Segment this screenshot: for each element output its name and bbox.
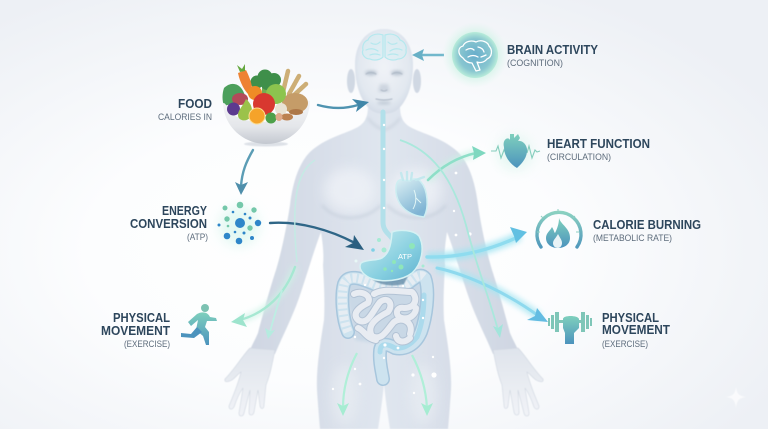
label: heart function — [547, 136, 650, 163]
esophagus — [383, 112, 393, 240]
bread roll — [282, 93, 308, 113]
icon: corner sparkle — [726, 387, 746, 408]
label: energy conversion: ENERGY — [162, 203, 207, 218]
heart organ — [396, 172, 427, 217]
arrow: food to mouth — [318, 99, 369, 112]
gauge arc — [537, 212, 581, 247]
orb — [452, 32, 498, 78]
arrow: energy to stomach — [270, 223, 364, 250]
label: physical movement right — [602, 310, 670, 350]
icon: runner — [181, 304, 217, 345]
facial lines — [366, 72, 402, 100]
label: calorie burning — [593, 217, 701, 244]
floating energy particles — [354, 238, 430, 268]
brain outline — [459, 41, 491, 71]
label: physical movement left — [101, 310, 170, 350]
arrow: physical movement left — [231, 267, 295, 327]
label: heart function: HEART FUNCTION — [547, 136, 650, 151]
leaves — [222, 84, 245, 106]
label: brain activity: (COGNITION) — [507, 58, 563, 69]
arrow: physical movement right — [437, 268, 548, 322]
label: food: CALORIES IN — [158, 112, 212, 123]
muscle shading — [322, 118, 446, 218]
label: brain activity: BRAIN ACTIVITY — [507, 42, 598, 57]
broccoli — [250, 70, 281, 94]
molecule dots — [222, 202, 257, 231]
label: physical movement right: MOVEMENT — [602, 322, 670, 337]
label: food: FOOD — [178, 96, 212, 111]
carrot — [238, 70, 252, 97]
arrow: left shoulder flow — [295, 160, 315, 262]
icon: dumbbell with fist — [548, 312, 592, 344]
small intestine — [354, 291, 416, 342]
label: physical movement right: (EXERCISE) — [602, 339, 648, 350]
orb glow — [442, 22, 508, 88]
label: heart function: (CIRCULATION) — [547, 152, 611, 163]
label: calorie burning: (METABOLIC RATE) — [593, 233, 672, 244]
ATP label: ATP — [398, 252, 412, 261]
label: calorie burning: CALORIE BURNING — [593, 217, 701, 232]
icon: calorie gauge with flame — [537, 209, 581, 248]
heart shape — [504, 134, 527, 168]
stomach particles — [383, 243, 415, 272]
label: physical movement left: MOVEMENT — [101, 323, 170, 338]
label: physical movement right: PHYSICAL — [602, 310, 659, 325]
gauge ticks — [537, 209, 579, 232]
large intestine — [342, 276, 427, 379]
label: physical movement left: PHYSICAL — [113, 310, 170, 325]
chest highlights — [324, 168, 442, 425]
arrow: calorie burning — [427, 227, 527, 257]
stomach underside shadow — [366, 272, 408, 286]
arrow: right leg downward — [412, 355, 433, 416]
label: physical movement left: (EXERCISE) — [124, 339, 170, 350]
dumbbell — [548, 312, 592, 332]
label: brain activity — [507, 42, 598, 69]
torso and limbs silhouette — [225, 29, 543, 429]
icon: energy conversion ATP molecules — [218, 202, 261, 246]
icon: food bowl — [222, 64, 310, 146]
label: energy conversion: (ATP) — [187, 232, 208, 243]
abdomen backdrop — [345, 272, 428, 348]
face shadows — [365, 70, 403, 104]
bowl body — [223, 101, 310, 144]
fist and forearm — [563, 316, 579, 344]
fruits — [266, 84, 286, 104]
face details — [365, 70, 403, 104]
leg and arm sparkles — [332, 172, 472, 394]
flame — [546, 218, 570, 248]
human body figure — [225, 29, 543, 429]
wheat — [283, 71, 306, 96]
pulse lines — [491, 146, 540, 158]
label: energy conversion: CONVERSION — [130, 216, 207, 231]
icon: brain activity orb — [442, 22, 508, 88]
esophagus particles — [383, 124, 385, 209]
icon: heart with pulse — [491, 134, 540, 171]
colon particles — [364, 284, 424, 359]
arrow: heart function — [428, 146, 486, 180]
brain in head — [362, 34, 406, 60]
heart glow — [497, 135, 533, 171]
stomach — [360, 230, 422, 281]
arrow: brain activity to head — [412, 49, 444, 61]
label: food — [158, 96, 212, 123]
molecule glow — [219, 206, 259, 246]
bowl shadow — [244, 142, 288, 146]
arrow: left arm downward — [265, 290, 282, 339]
arrow: food to energy — [235, 150, 253, 195]
arrow: right arm downward — [400, 140, 503, 338]
arrow: left leg downward — [337, 353, 357, 416]
label: energy conversion — [130, 203, 208, 243]
